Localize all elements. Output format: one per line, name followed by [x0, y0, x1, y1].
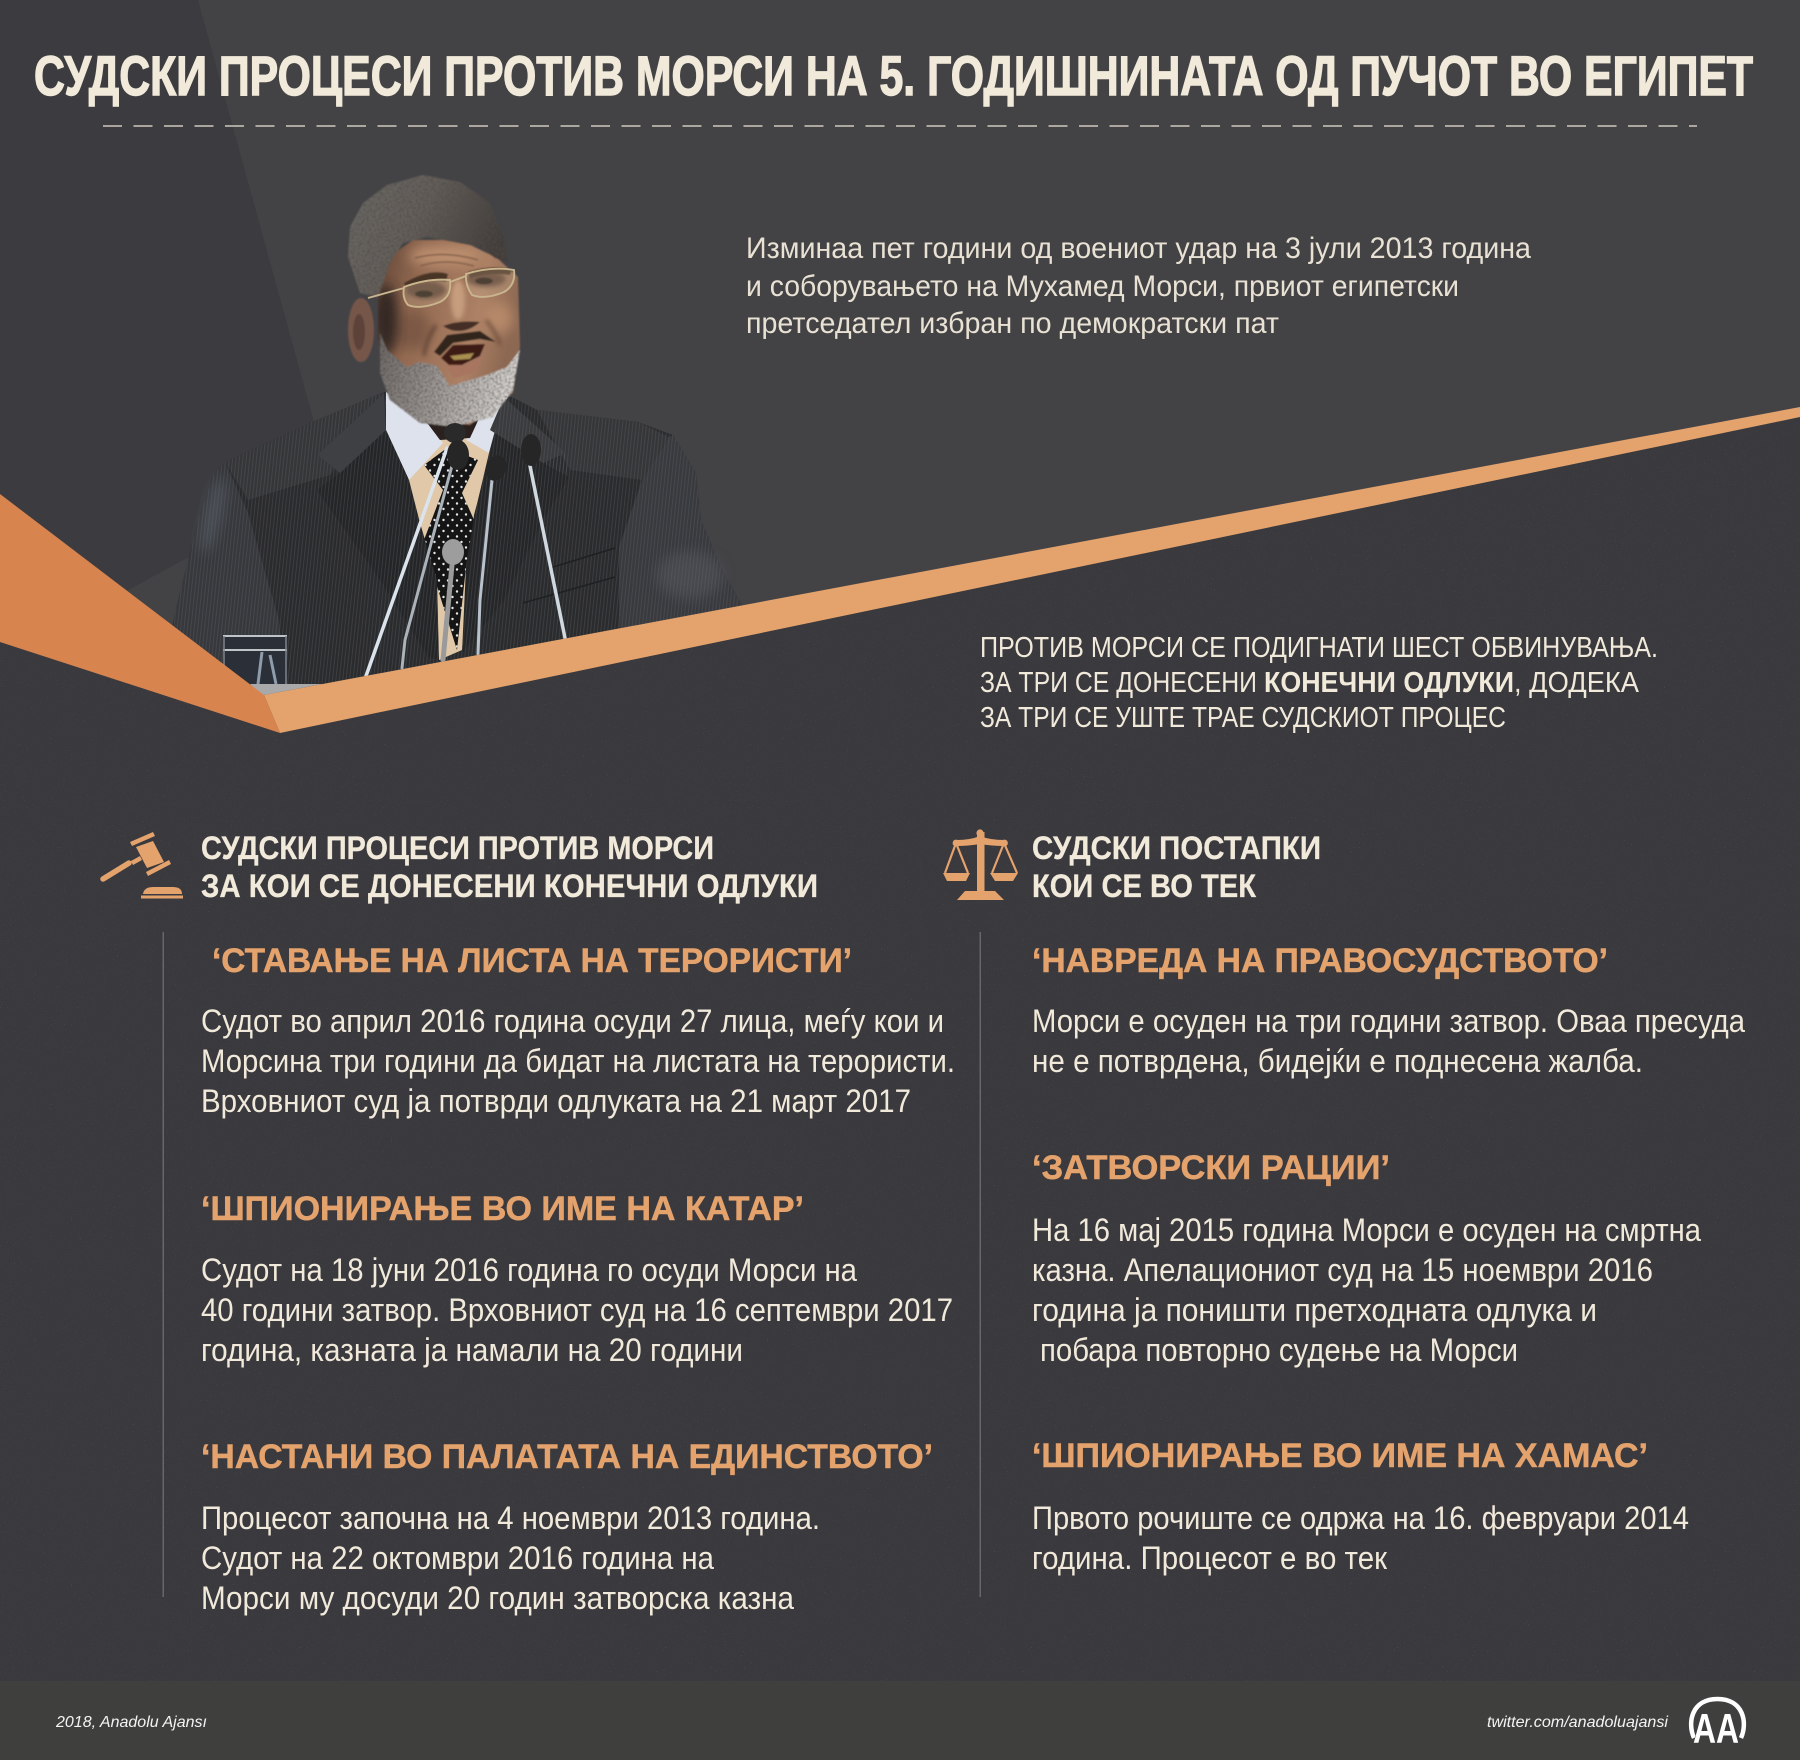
case: prison raids: година ја поништи претходната одлука и: [1032, 1292, 1597, 1328]
case: terrorist list: ‘СТАВАЊЕ НА ЛИСТА НА ТЕРОРИСТИ’: [212, 942, 852, 980]
footer twitter link: twitter.com/anadoluajansi: [1487, 1714, 1668, 1731]
charges summary paragraph: ЗА ТРИ СЕ УШТЕ ТРАЕ СУДСКИОТ ПРОЦЕС: [980, 702, 1506, 734]
case: espionage for Qatar: Судот на 18 јуни 2016 година го осуди Морси на: [201, 1252, 857, 1288]
icon: Anadolu Agency logo: AA: [1693, 1705, 1739, 1752]
case: prison raids: казна. Апелациониот суд на 15 ноември 2016: [1032, 1252, 1653, 1288]
orange ribbon: light band: [264, 407, 1800, 733]
left column divider: [162, 932, 164, 1597]
eyeglasses: [368, 269, 514, 307]
drinking glass: [223, 636, 287, 686]
case: espionage for Hamas: ‘ШПИОНИРАЊЕ ВО ИМЕ НА ХАМАС’: [1032, 1437, 1648, 1475]
left section heading: [201, 830, 818, 904]
case: presidential palace events: Судот на 22 октомври 2016 година на: [201, 1540, 714, 1576]
case: presidential palace events: ‘НАСТАНИ ВО ПАЛАТАТА НА ЕДИНСТВОТО’: [201, 1438, 933, 1476]
case: terrorist list: Судот во април 2016 година осуди 27 лица, меѓу кои и: [201, 1003, 944, 1039]
background: upper panel: [0, 0, 1800, 760]
footer bar: [0, 1681, 1800, 1760]
charges summary paragraph: ЗА ТРИ СЕ ДОНЕСЕНИ: [980, 667, 1257, 699]
case: terrorist list: Морсина три години да бидат на листата на терористи.: [201, 1043, 955, 1079]
microphones: [366, 423, 565, 676]
case: prison raids: побара повторно судење на Морси: [1040, 1332, 1518, 1368]
case: insulting the judiciary: не е потврдена, бидејќи е поднесена жалба.: [1032, 1043, 1643, 1079]
case: espionage for Qatar: ‘ШПИОНИРАЊЕ ВО ИМЕ НА КАТАР’: [201, 1190, 804, 1228]
case: prison raids: [1032, 1149, 1701, 1368]
case: espionage for Qatar: 40 години затвор. Врховниот суд на 16 септември 2017: [201, 1292, 953, 1328]
case: presidential palace events: [201, 1438, 933, 1616]
case: espionage for Hamas: [1032, 1437, 1689, 1576]
charges summary paragraph: [980, 632, 1658, 734]
right section heading: [1032, 830, 1321, 904]
necktie: [424, 448, 478, 650]
icon: gavel: [103, 832, 183, 898]
shirt and collar: [386, 392, 508, 660]
case: presidential palace events: Морси му досуди 20 годин затворска казна: [201, 1580, 794, 1616]
background: dark left wedge: [0, 0, 330, 660]
case: terrorist list: [201, 942, 955, 1119]
left section heading: ЗА КОИ СЕ ДОНЕСЕНИ КОНЕЧНИ ОДЛУКИ: [201, 868, 818, 904]
intro paragraph: [746, 232, 1531, 340]
case: prison raids: На 16 мај 2015 година Морси е осуден на смртна: [1032, 1212, 1701, 1248]
case: presidential palace events: Процесот започна на 4 ноември 2013 година.: [201, 1500, 820, 1536]
head: [348, 175, 520, 427]
case: espionage for Hamas: година. Процесот е во тек: [1032, 1540, 1388, 1576]
case: insulting the judiciary: [1032, 942, 1745, 1079]
right section heading: СУДСКИ ПОСТАПКИ: [1032, 830, 1321, 866]
intro paragraph: и соборувањето на Мухамед Морси, првиот египетски: [746, 270, 1459, 303]
case: insulting the judiciary: Морси е осуден на три години затвор. Оваа пресуда: [1032, 1003, 1745, 1039]
charges summary paragraph: ПРОТИВ МОРСИ СЕ ПОДИГНАТИ ШЕСТ ОБВИНУВАЊА.: [980, 632, 1658, 664]
case: insulting the judiciary: ‘НАВРЕДА НА ПРАВОСУДСТВОТО’: [1032, 942, 1608, 980]
case: espionage for Qatar: [201, 1190, 953, 1368]
case: terrorist list: Врховниот суд ја потврди одлуката на 21 март 2017: [201, 1083, 911, 1119]
charges summary paragraph: , ДОДЕКА: [1514, 667, 1640, 699]
jacket lapels: [317, 393, 569, 660]
right column divider: [980, 932, 981, 1597]
background: lower textured panel: [0, 417, 1800, 1681]
case: espionage for Hamas: Првото рочиште се одржа на 16. февруари 2014: [1032, 1500, 1689, 1536]
case: prison raids: ‘ЗАТВОРСКИ РАЦИИ’: [1032, 1149, 1390, 1187]
orange ribbon: dark left wedge: [0, 494, 280, 733]
intro paragraph: Изминаа пет години од воениот удар на 3 јули 2013 година: [746, 232, 1531, 265]
charges summary paragraph: КОНЕЧНИ ОДЛУКИ: [1264, 667, 1514, 699]
suit jacket: [170, 392, 760, 700]
left section heading: СУДСКИ ПРОЦЕСИ ПРОТИВ МОРСИ: [201, 830, 714, 866]
intro paragraph: претседател избран по демократски пат: [746, 307, 1279, 340]
footer credit: 2018, Anadolu Ajansı: [55, 1714, 207, 1731]
case: espionage for Qatar: година, казната ја намали на 20 години: [201, 1332, 743, 1368]
lectern top: [250, 684, 322, 695]
icon: scales of justice: [943, 829, 1018, 900]
right section heading: КОИ СЕ ВО ТЕК: [1032, 868, 1256, 904]
photo: speaker at microphones: [170, 175, 760, 700]
